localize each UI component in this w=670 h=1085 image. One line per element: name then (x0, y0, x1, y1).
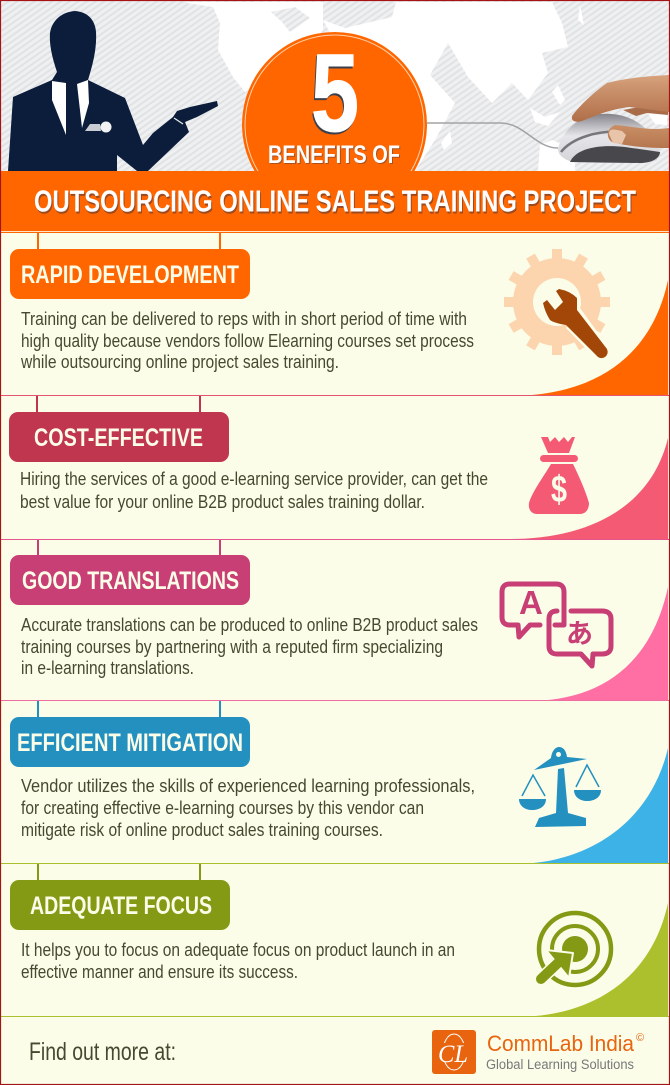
heading: efficient mitigation: EFFICIENT MITIGATION (17, 729, 243, 757)
icon: money bag: $ (551, 469, 567, 511)
number 5: 5 (311, 32, 359, 155)
text: rapid development: while outsourcing online project sales training. (20, 352, 339, 372)
logo: CommLab India: © (636, 1032, 644, 1044)
heading: rapid development: RAPID DEVELOPMENT (21, 261, 239, 289)
text: adequate focus: effective manner and ensure its success. (21, 962, 298, 982)
logo: CommLab India: CL (438, 1041, 468, 1068)
text: rapid development (20, 309, 474, 372)
logo: CommLab India (432, 1030, 644, 1074)
title badge circle (242, 32, 427, 171)
text: cost-effective: Hiring the services of a good e-learning service provider, can get the (20, 469, 488, 489)
text: adequate focus (21, 940, 455, 982)
presenter silhouette (8, 11, 218, 171)
header illustration (1, 1, 669, 171)
text: efficient mitigation: Vendor utilizes the skills of experienced learning professionals, (21, 776, 475, 796)
heading: good translations (10, 555, 250, 605)
text: good translations (21, 615, 478, 678)
panel: efficient mitigation (0, 701, 670, 864)
mouse cable (427, 123, 558, 148)
panel: rapid development (0, 233, 670, 396)
heading: good translations: GOOD TRANSLATIONS (22, 567, 239, 595)
icon: target with arrow (539, 913, 611, 985)
heading: cost-effective: COST-EFFECTIVE (34, 424, 203, 452)
title banner (0, 171, 670, 233)
text: good translations: in e-learning translations. (21, 658, 194, 678)
footer call to action: Find out more at: (29, 1038, 176, 1066)
world map (187, 2, 667, 171)
panel: adequate focus (0, 864, 670, 1017)
icon: balance scales (519, 747, 601, 827)
text: rapid development: Training can be delivered to reps with in short period of time with (21, 309, 467, 329)
icon: translation speech bubbles (502, 584, 611, 666)
text: efficient mitigation: for creating effective e-learning courses by this vendor can (21, 798, 424, 818)
logo: CommLab India: CommLab India (487, 1031, 635, 1056)
logo: CommLab India: Global Learning Solutions (486, 1057, 634, 1072)
text: adequate focus: It helps you to focus on adequate focus on product launch in an (21, 940, 455, 960)
heading: efficient mitigation (10, 717, 250, 767)
heading: adequate focus: ADEQUATE FOCUS (30, 892, 212, 920)
icon: translation speech bubbles: A (519, 584, 543, 621)
text: efficient mitigation (21, 776, 475, 840)
panel: cost-effective (0, 396, 670, 540)
heading: cost-effective (9, 412, 229, 462)
hand on mouse (558, 75, 669, 163)
text: cost-effective (20, 469, 488, 512)
text: good translations: training courses by partnering with a reputed firm specializing (21, 637, 443, 657)
text: cost-effective: best value for your online B2B product sales training dollar. (20, 492, 425, 512)
icon: translation speech bubbles: あ (566, 619, 593, 649)
panel: good translations (0, 540, 670, 701)
icon: money bag (529, 437, 589, 514)
text: efficient mitigation: mitigate risk of online product sales training courses. (21, 820, 383, 840)
heading: adequate focus (10, 880, 230, 930)
subtitle: benefits of: BENEFITS OF (268, 141, 400, 169)
heading: rapid development (10, 249, 250, 299)
text: good translations: Accurate translations can be produced to online B2B product sales (21, 615, 478, 635)
text: rapid development: high quality because vendors follow Elearning courses set process (21, 331, 474, 351)
icon: gear and wrench (504, 249, 612, 360)
